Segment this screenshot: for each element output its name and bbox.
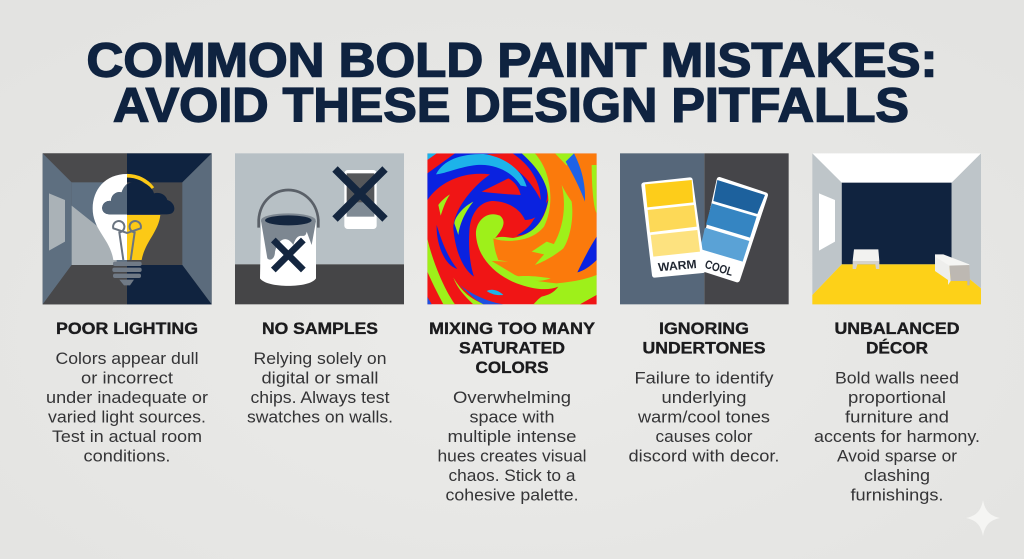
text block: no samples: swatches on walls. [247, 408, 393, 426]
text block: ignoring undertones: causes color [656, 428, 753, 446]
text block: poor lighting: Test in actual room [52, 428, 202, 446]
text block: mixing too many saturated colors: hues creates visual [438, 448, 586, 466]
text block: ignoring undertones: warm/cool tones [637, 408, 770, 426]
text block: unbalanced decor [814, 320, 980, 504]
title [86, 34, 938, 132]
text block: no samples: digital or small [262, 370, 378, 388]
icon: cool swatch card [700, 180, 765, 280]
text block: poor lighting: conditions. [84, 448, 170, 466]
icon: sparkle [966, 500, 1000, 536]
text block: poor lighting [46, 320, 209, 466]
text block: mixing too many saturated colors: Overwhelming [453, 389, 571, 407]
text block: no samples [247, 320, 393, 426]
panel: poor lighting illustration [43, 153, 212, 304]
text block: poor lighting: varied light sources. [48, 408, 206, 426]
text block: ignoring undertones [628, 320, 780, 466]
text block: ignoring undertones: IGNORING [659, 320, 749, 338]
icon: small table [853, 249, 879, 269]
icon: warm swatch card: WARM [657, 257, 697, 274]
icon: warm swatch card [644, 180, 703, 275]
text block: mixing too many saturated colors: COLORS [476, 359, 548, 377]
text block: no samples: Relying solely on [254, 350, 386, 368]
text block: mixing too many saturated colors: chaos. Stick to a [448, 467, 576, 485]
text block: unbalanced decor: proportional [848, 389, 946, 407]
text block: no samples: chips. Always test [250, 389, 390, 407]
text block: poor lighting: POOR LIGHTING [56, 320, 198, 338]
text block: mixing too many saturated colors: MIXING TOO MANY [429, 320, 595, 338]
text block: ignoring undertones: UNDERTONES [642, 340, 766, 358]
title: AVOID THESE DESIGN PITFALLS [113, 80, 909, 132]
title: COMMON BOLD PAINT MISTAKES: [86, 34, 938, 88]
text block: ignoring undertones: discord with decor. [628, 448, 780, 466]
text block: unbalanced decor: DÉCOR [866, 338, 928, 358]
panel: no samples illustration [235, 153, 404, 304]
text block: unbalanced decor: furniture and [845, 408, 949, 426]
text block: mixing too many saturated colors: cohesive palette. [446, 486, 578, 504]
panel: unbalanced decor illustration [812, 153, 981, 304]
text block: poor lighting: or incorrect [81, 370, 173, 388]
text block: unbalanced decor: UNBALANCED [834, 320, 960, 338]
icon: crossed-out phone [335, 169, 385, 229]
text block: poor lighting: Colors appear dull [56, 350, 198, 368]
icon: light bulb with cloud [93, 174, 174, 285]
icon: crossed-out paint can [259, 190, 318, 286]
panel: ignoring undertones illustration [620, 153, 789, 304]
text block: mixing too many saturated colors: space with [470, 408, 554, 426]
text block: ignoring undertones: underlying [662, 389, 746, 407]
text block: mixing too many saturated colors: SATURATED [459, 340, 565, 358]
icon: bench [935, 254, 970, 285]
text block: unbalanced decor: accents for harmony. [814, 428, 980, 446]
text block: unbalanced decor: Avoid sparse or [837, 448, 958, 466]
text block: ignoring undertones: Failure to identify [634, 370, 774, 388]
panel: saturated colour swirl [427, 153, 597, 304]
text block: no samples: NO SAMPLES [262, 320, 378, 338]
text block: mixing too many saturated colors [429, 320, 595, 504]
text block: unbalanced decor: clashing [864, 467, 930, 485]
icon: cool swatch card: COOL [703, 257, 735, 279]
text block: unbalanced decor: Bold walls need [835, 370, 959, 388]
text block: mixing too many saturated colors: multiple intense [448, 428, 576, 446]
text block: poor lighting: under inadequate or [46, 389, 209, 407]
text block: unbalanced decor: furnishings. [850, 486, 944, 504]
